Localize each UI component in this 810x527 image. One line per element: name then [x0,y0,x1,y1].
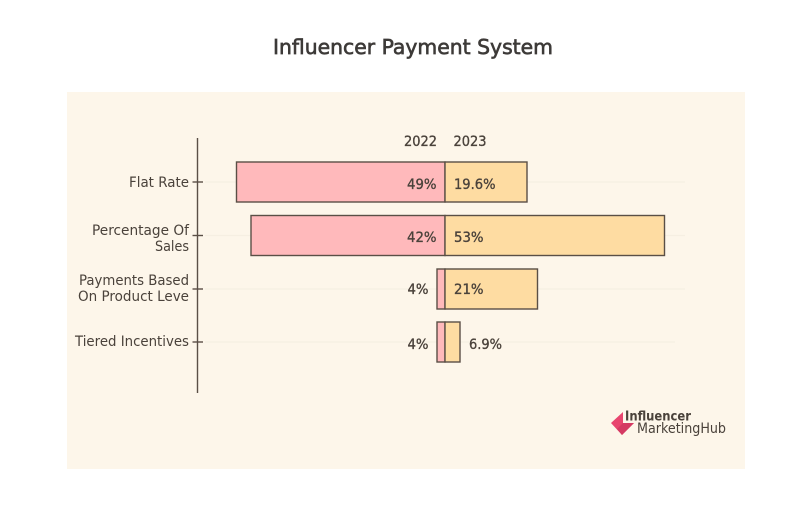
title: Influencer Payment System [273,35,553,59]
value labels: 6.9% [469,337,502,353]
logo wordmark [625,408,726,437]
category label: Flat Rate: Flat Rate [129,175,189,191]
logo: Influencer MarketingHub [611,408,726,437]
icon: logo diamond [611,412,634,435]
category label: Percentage Of Sales: Sales [155,239,189,255]
value labels: 21% [454,282,484,298]
logo wordmark: Influencer [625,408,691,424]
row: Percentage Of Sales bars [251,216,664,256]
panel: chart background [67,92,745,469]
value labels [407,177,502,353]
value labels: 49% [407,177,436,193]
category label: Percentage Of Sales: Percentage Of [92,223,190,239]
axis [192,138,203,393]
row: Flat Rate bars [236,162,527,202]
value labels: 4% [408,282,428,298]
value labels: 53% [454,230,484,246]
value labels: 19.6% [454,177,496,193]
row: Payments Based On Product Leve bars [437,269,538,309]
logo wordmark: MarketingHub [637,421,726,437]
category label: Payments Based On Product Leve [78,273,189,305]
category label: Payments Based On Product Leve: Payments Based [79,273,189,289]
column header: 2023: 2023 [454,134,486,150]
value labels: 42% [407,230,436,246]
row: Tiered Incentives bars [437,322,460,362]
column header: 2022: 2022 [404,134,437,150]
category label: Percentage Of Sales [92,223,190,255]
value labels: 4% [408,337,428,353]
category label: Tiered Incentives: Tiered Incentives [74,334,189,350]
bar chart [74,134,685,393]
category label: Payments Based On Product Leve: On Product Leve [78,289,189,305]
